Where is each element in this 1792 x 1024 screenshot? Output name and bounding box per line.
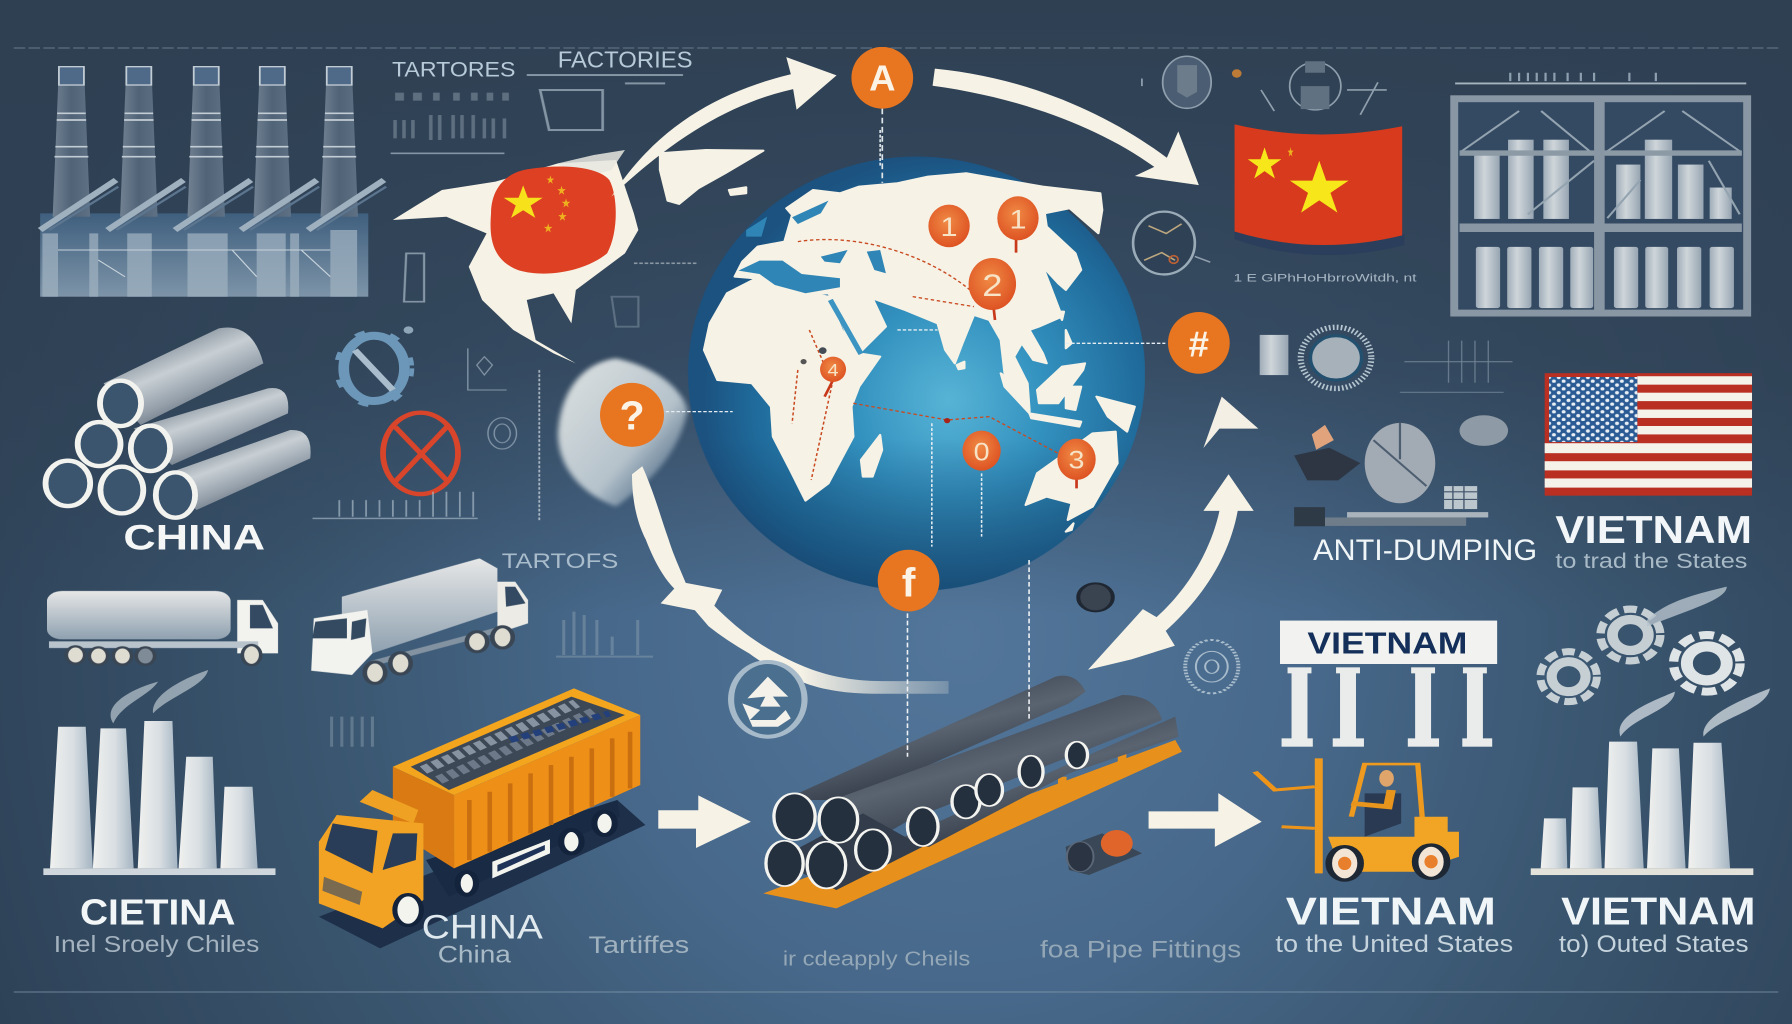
arrow: lower left arc (632, 466, 949, 694)
truck: side view tanker (47, 591, 278, 665)
label: supply chains: ir cdeapply Cheils (783, 948, 970, 971)
badge: top process marker: A (869, 57, 895, 98)
routes and pins on globe: 1 (941, 213, 958, 242)
label: Cietina: CIETINA (80, 892, 235, 933)
badge: left process marker: ? (619, 393, 645, 439)
icon: valve gear (336, 326, 413, 406)
arrow: top left arc (611, 57, 837, 197)
target icon (1185, 640, 1238, 693)
stack of steel pipes (46, 327, 311, 518)
sign: Vietnam banner (1280, 621, 1497, 664)
small pipe fitting (1066, 830, 1142, 875)
map: North America (393, 160, 638, 363)
flag: Vietnam (1235, 124, 1404, 255)
arrow: pipes to forklift (1149, 793, 1262, 847)
sublabel: to Outed States: to) Outed States (1559, 931, 1749, 958)
white chimneys with smoke (1531, 688, 1770, 875)
left column illustrations: factory, pipes and map (40, 67, 696, 520)
label: Tartores: TARTORES (392, 57, 515, 82)
label: Tariffs: Tartiffes (589, 932, 689, 959)
label: pipe fittings: foa Pipe Fittings (1040, 937, 1241, 964)
recycle icon (731, 662, 805, 737)
badge: right process marker: # (1189, 324, 1209, 365)
label: Vietnam forklift: VIETNAM (1286, 891, 1496, 934)
sublabel: China: China (438, 941, 512, 968)
factory building with chimneys (40, 67, 386, 297)
lower left: tanker trucks, chimneys and orange truck (43, 558, 805, 948)
badge: right process marker (1168, 312, 1230, 374)
icon: prohibited sign (383, 413, 458, 494)
sign: Vietnam banner: VIETNAM (1307, 626, 1467, 661)
routes and pins on globe: 2 (982, 268, 1002, 303)
label: Vietnam right: VIETNAM (1555, 509, 1752, 552)
icons: trade sketch cluster top (1133, 56, 1387, 274)
label: Vietnam far right: VIETNAM (1561, 891, 1755, 934)
label: Factories: FACTORIES (558, 46, 693, 72)
label: China near truck: CHINA (422, 908, 543, 946)
arrow: short head right of globe (1203, 397, 1258, 448)
text strip under flag: 1 E GlPhHoHbrroWitdh, nt (1233, 271, 1417, 284)
badge: top process marker (851, 47, 913, 183)
pallet of black steel pipes (763, 676, 1182, 908)
arrow: top right arc (933, 69, 1199, 185)
sublabel: to trade states: to trad the States (1555, 548, 1748, 573)
truck: angled tanker (311, 558, 528, 683)
badge: left process marker (600, 383, 664, 447)
label: Anti-Dumping: ANTI-DUMPING (1313, 534, 1537, 567)
routes and pins on globe: 3 (1069, 446, 1085, 474)
routes and pins on globe (666, 130, 1165, 547)
sketch: bar details (332, 612, 653, 747)
icon cluster: anti-dumping machinery (1260, 327, 1512, 526)
cluster of gears (1540, 587, 1740, 702)
arrow: lower right arc (1088, 474, 1254, 670)
routes and pins on globe: 4 (828, 360, 839, 380)
temple columns (1282, 667, 1492, 747)
map: continents on globe (660, 150, 1135, 532)
flag: United States (1545, 373, 1752, 496)
label: China under pipes: CHINA (123, 518, 265, 558)
right column illustrations: icons, flags and shelf (1133, 56, 1752, 526)
sublabel: steel supply chains: Inel Sroely Chiles (54, 931, 259, 957)
flag badge: China on map (491, 166, 616, 274)
badge: bottom process marker: f (902, 560, 916, 606)
routes and pins on globe: 1 (1009, 205, 1026, 235)
map: South America faded (558, 358, 687, 507)
dashed connectors to pipes (907, 560, 1029, 757)
chimneys with smoke (43, 670, 275, 875)
globe (660, 130, 1165, 591)
arrow: truck to pipes (658, 795, 751, 848)
map: arctic islands (558, 150, 625, 173)
label: Tartofs: TARTOFS (502, 548, 618, 573)
icon: sketch details (312, 75, 696, 520)
small ring icon (1078, 583, 1113, 611)
truck: orange container with pipes (319, 688, 645, 948)
lower right: pipes, temple, forklift, chimneys (763, 560, 1770, 908)
forklift (1255, 758, 1459, 880)
routes and pins on globe: 0 (974, 438, 990, 466)
sublabel: to the United States: to the United States (1275, 931, 1513, 958)
badge: bottom process marker (878, 550, 939, 611)
storage shelf with cylinders (1454, 73, 1747, 313)
